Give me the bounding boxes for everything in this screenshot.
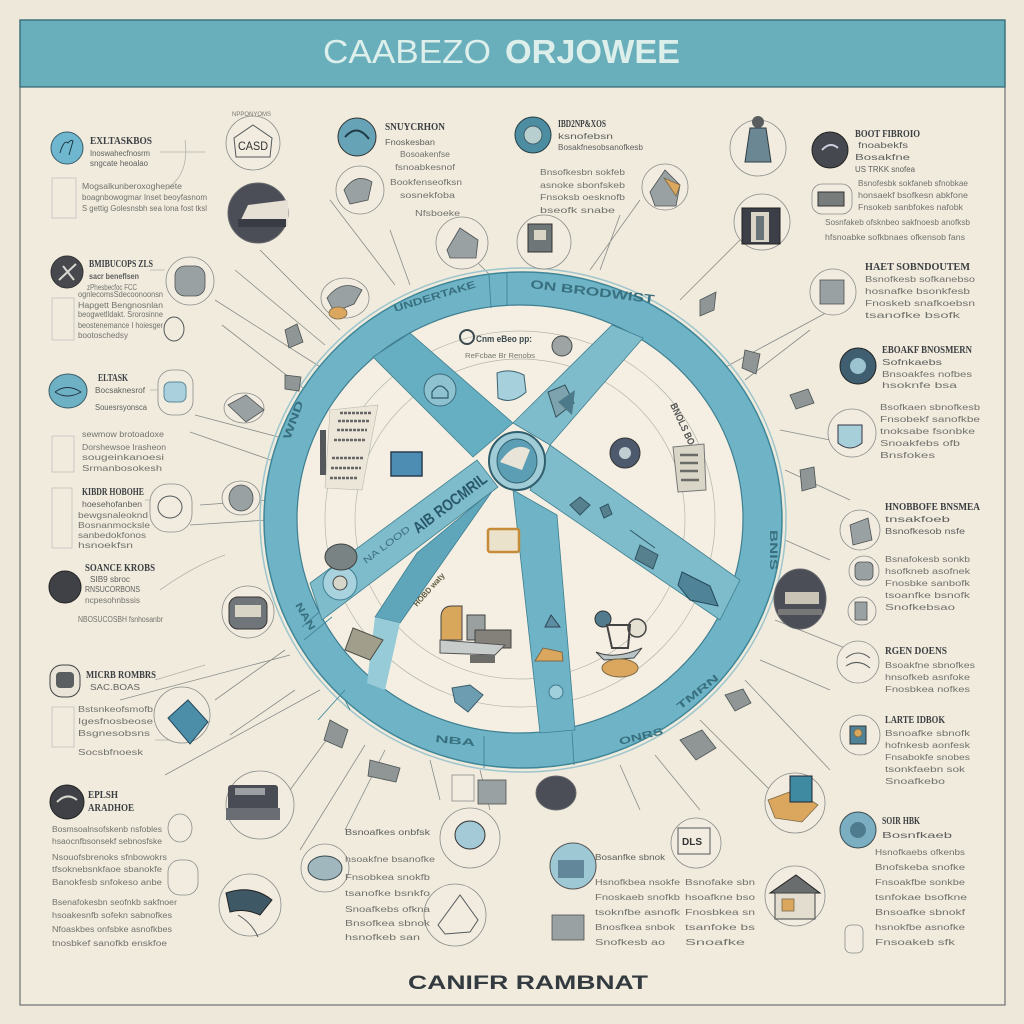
icon: hexagon badge: CASD	[238, 139, 268, 153]
text block: top right: Sosnfakeb ofsknbeo sakfnoesb anofksb	[825, 218, 971, 227]
text block: left 7: hsoakesnfb sofekn sabnofkes	[52, 911, 172, 920]
ring labels: ON BRODWIST	[530, 277, 656, 306]
text block: right 3: hsofkneb asofnek	[885, 567, 971, 576]
text block: top right: Bsnofesbk sokfaneb sfnobkae	[858, 179, 969, 188]
text block: left 3	[49, 373, 166, 473]
icon: blue disc	[840, 348, 876, 384]
text block: left 4: hoesehofanben	[82, 500, 142, 509]
text block: left 2: bootoschedsy	[78, 331, 128, 340]
text block: bottom left	[345, 828, 436, 942]
text block: right 2: hsoknfe bsa	[882, 381, 958, 390]
icon: blue fish	[49, 374, 87, 408]
text block: left 6: Igesfnosbeose	[78, 717, 154, 726]
text block: left 7: hsaocnfbsonsekf sebnosfske	[52, 837, 163, 846]
wheel: spokes	[310, 325, 740, 733]
icon: orange frame	[488, 529, 519, 552]
text block: left 2: BMIBUCOPS ZLS	[89, 259, 153, 270]
icon: blue card	[391, 452, 422, 476]
outer icons: right side	[765, 269, 880, 953]
text block: left 6: Socsbfnoesk	[78, 748, 144, 757]
text block: left 3: Dorshewsoe Irasheon	[82, 443, 166, 452]
text block: top centre: ksnofebsn	[558, 132, 613, 141]
caption text: Cnm eBeo pp:	[476, 334, 532, 344]
text block: top left: sosnekfoba	[400, 191, 456, 200]
text block: bottom right: Bsnofake sbn	[685, 878, 755, 887]
icon: fish bubble	[158, 370, 193, 415]
text block: right 2: Sofnkaebs	[882, 358, 942, 367]
text block: bottom centre	[595, 853, 681, 947]
icon: small block two	[848, 597, 876, 625]
text block: left 7: Bsenafokesbn seofnkb sakfnoer	[52, 898, 177, 907]
icon: crumpled bag	[452, 685, 483, 712]
text block: right 4	[885, 646, 975, 694]
text block: bottom centre: tsoknfbe asnofk	[595, 908, 681, 917]
text block: bottom right: hsoafkne bso	[685, 893, 756, 902]
text block: right 5	[885, 715, 971, 786]
icon: pad	[321, 278, 369, 319]
icon: eye	[219, 874, 281, 937]
icon: dark dome small	[536, 776, 576, 810]
text block: right 6: tsnfokae bsofkne	[875, 893, 968, 902]
text block: left 6: Bsgnesobsns	[78, 729, 150, 738]
icon: orange dot disc	[840, 715, 880, 755]
text block: right 4: hnsofkeb asnfoke	[885, 673, 971, 682]
icon: blue bag	[154, 687, 210, 744]
spoke label	[361, 471, 491, 566]
text block: right 2: Bnsfokes	[880, 451, 935, 460]
icon: lines disc	[837, 641, 879, 683]
text block: left 1: S gettig Golesnsbh sea lona fost tksl	[82, 204, 207, 213]
text block: left 4: bewgsnaleoknd	[78, 511, 148, 520]
text block: bottom centre: Hsnofkbea nsokfe	[595, 878, 681, 887]
icon: dark shell	[50, 785, 84, 819]
text block: left 4: Bosnanmocksle	[78, 521, 151, 530]
text block: bottom left: Fnsobkea snokfb	[345, 873, 431, 882]
text block: left 7: tfsoknebsnkfaoe sbanokfe	[52, 865, 163, 874]
text block: right 3	[885, 502, 981, 612]
text block: top centre: Fnsoksb oesknofb	[540, 193, 626, 202]
footer title: CANIFR RAMBNAT	[408, 973, 649, 994]
icon: stack card	[548, 385, 574, 417]
centre hub	[489, 432, 545, 490]
icon: press	[226, 771, 294, 839]
icon: small glyph	[845, 925, 863, 953]
text block: right 5: Bsnoafke sbnofk	[885, 729, 971, 738]
text block: top right: Bosakfne	[855, 153, 911, 162]
icon: left mini icon	[164, 317, 184, 341]
title	[323, 33, 680, 70]
text block: right 2: Snoakfebs ofb	[880, 439, 961, 448]
icon: mug	[828, 409, 876, 457]
text block: left 4	[52, 487, 151, 550]
text block: top centre: Bnsofkesbn sokfeb	[540, 168, 626, 177]
spoke icons	[424, 374, 718, 699]
spoke label: AIB ROCMRIL	[410, 471, 491, 537]
text block: bottom centre: Snofkesb ao	[595, 938, 666, 947]
icon: roof	[224, 393, 264, 423]
text block: left 5: RNSUCORBONS	[85, 585, 140, 594]
icon: shop	[765, 866, 825, 926]
icon: outline card	[150, 484, 192, 532]
icon: ring	[440, 808, 500, 868]
icon: tool	[840, 510, 880, 550]
text block: top right: BOOT FIBROIO	[855, 129, 920, 140]
text block: top centre: bseofk snabe	[540, 206, 616, 215]
icon: register	[810, 269, 856, 315]
text block: right 6: hsnokfbe asnofke	[875, 923, 966, 932]
icon: house orange	[642, 164, 688, 210]
icon: roofed machine	[424, 884, 486, 946]
text block: bottom centre: Fnoskaeb snofkb	[595, 893, 681, 902]
text block: right 6: Bnsoafke sbnokf	[875, 908, 966, 917]
text block: right 1: HAET SOBNDOUTEM	[865, 262, 971, 273]
text block: right 2: Fnsobekf sanofkbe	[880, 415, 981, 424]
text block: left 4: sanbedokfonos	[78, 531, 146, 540]
text block: top left: Bosoakenfse	[400, 150, 451, 159]
icon: sewing figure	[595, 611, 646, 677]
text block: top right: hfsnoabke sofkbnaes ofkensob fans	[825, 233, 965, 242]
text block: bottom left: tsanofke bsnkfo	[345, 889, 431, 898]
ring labels: WND	[282, 399, 307, 441]
text block: left 2: Hapgett Bengnosnlan	[78, 301, 163, 310]
icon: door	[734, 194, 790, 250]
text block: bottom centre: Bosanfke sbnok	[595, 853, 666, 862]
icon: glass	[550, 843, 596, 889]
icon: stand	[517, 215, 571, 269]
text block: top left: Bookfenseofksn	[390, 178, 462, 187]
text block: right 6: Fnsoakfbe sonkbe	[875, 878, 966, 887]
icon: ticket	[345, 628, 383, 660]
text block: left 7: Bosmsoalnsofskenb nsfobles	[52, 825, 162, 834]
ring labels: BNIS	[767, 530, 779, 570]
text block: right 5: Fnsabokfe snobes	[885, 753, 970, 762]
icon: small block	[849, 556, 879, 586]
text block: top centre: Bosakfnesobsanofkesb	[558, 143, 644, 152]
icon: orange tool	[765, 773, 825, 833]
text block: left 3: Srmanbosokesh	[82, 464, 162, 473]
text block: top right: fnoabekfs	[858, 141, 908, 150]
text block: right 6: Bosnfkaeb	[882, 831, 953, 840]
spoke label: NA LOOD	[361, 523, 412, 566]
icon: hexagon badge	[226, 112, 280, 170]
text block: left 2: ognlecomsSdecoonoonsn	[78, 290, 163, 299]
text block: left 1: Mogsalkunberoxoghenete	[82, 182, 183, 191]
ring labels: ONRS	[618, 726, 665, 748]
icon: globe	[222, 481, 260, 515]
icon: file box: DLS	[682, 837, 702, 848]
header band	[20, 20, 1005, 87]
outer icons: top	[336, 116, 852, 269]
text block: right 1: Bsnofkesb sofkanebso	[865, 275, 976, 284]
text block: right 3: tsoanfke bsnofk	[885, 591, 971, 600]
icon: dark tool	[51, 256, 83, 288]
icon: dark film	[50, 665, 80, 697]
text block: right 1: hosnafke bsonkfesb	[865, 287, 971, 296]
text block: left 5	[49, 563, 163, 624]
icon: teal face	[515, 117, 551, 153]
text block: left 3: Souesrsyonsca	[95, 403, 148, 412]
text block: right 3: HNOBBOFE BNSMEA	[885, 502, 981, 513]
text block: left 4: hsnoekfsn	[78, 541, 133, 550]
text block: left 2: zPhesbecfoc FCC	[87, 283, 137, 292]
text block: right 3: Snofkebsao	[885, 603, 956, 612]
text block: left 3: sewmow brotoadoxe	[82, 430, 165, 439]
text block: top right: US TRKK snofea	[855, 165, 916, 174]
icon: document list	[320, 405, 378, 490]
icon: small base	[535, 615, 563, 661]
ring labels: NAN	[292, 601, 317, 632]
text block: left 5: NBOSUCOSBH fsnhosanbr	[78, 615, 163, 624]
text block: bottom right: tsanfoke bs	[685, 923, 755, 932]
text block: bottom right	[685, 878, 756, 947]
text block: left 1: EXLTASKBOS	[90, 136, 152, 147]
text block: top centre: asnoke sbonfskeb	[540, 181, 626, 190]
icon: dark orb	[610, 438, 640, 468]
ring labels: NBA	[435, 734, 476, 749]
icon: joint dial	[323, 544, 357, 600]
text block: bottom left: hsnofkeb san	[345, 933, 420, 942]
text block: right 1	[865, 262, 976, 320]
icon: grid disc	[166, 257, 214, 305]
icon: blue wave	[338, 118, 376, 156]
text block: left 2	[51, 256, 164, 340]
text block: right 1: Fnoskeb snafkoebsn	[865, 299, 975, 308]
icon: blue disc lower	[840, 812, 876, 848]
text block: left 3: ELTASK	[98, 373, 128, 384]
icon: file box	[671, 818, 721, 868]
text block: right 2: Bsofkaen sbnofkesb	[880, 403, 981, 412]
ring labels	[282, 277, 779, 749]
text block: left 2: beogwetlldakt. Srorosinne	[78, 310, 164, 319]
text block: bottom centre: Bnosfkea snbok	[595, 923, 676, 932]
text block: left 6: MICRB ROMBRS	[86, 670, 156, 681]
icon: helmet	[497, 371, 526, 400]
text block: right 2: tnoksabe fsonbke	[880, 427, 976, 436]
text block: left 7: tnosbkef sanofkb enskfoe	[52, 939, 168, 948]
text block: right 3: Fnosbke sanbofk	[885, 579, 971, 588]
text block: left 7: ARADHOE	[88, 803, 134, 814]
icon: cylinder device	[222, 586, 274, 638]
text block: top left: SNUYCRHON	[385, 122, 446, 133]
text block: right 6: Hsnofkaebs ofkenbs	[875, 848, 965, 857]
text block: bottom left: Bnsofkea sbnok	[345, 919, 431, 928]
ring segment dividers	[302, 273, 574, 768]
text block: left 1	[51, 132, 207, 218]
text block: left 7: EPLSH	[88, 790, 118, 801]
text block: left 6: Bstsnkeofsmofb	[78, 705, 154, 714]
text block: bottom left: Bsnoafkes onbfsk	[345, 828, 431, 837]
text block: right 5: LARTE IDBOK	[885, 715, 945, 726]
icon: right of caption	[552, 336, 572, 356]
text block: left 2: sacr beneflsen	[89, 272, 139, 281]
outer icons: bottom	[285, 292, 816, 946]
caption line: ReFcbae Br Renobs	[465, 353, 536, 360]
text block: right 6	[875, 816, 968, 947]
title: CAABEZO	[323, 33, 491, 70]
outer icons: left side	[150, 112, 369, 937]
text block: right 6: SOIR HBK	[882, 816, 920, 827]
icon: blue pen	[51, 132, 83, 164]
icon: sofa card	[812, 184, 852, 214]
icon: swirl	[460, 330, 474, 344]
text block: left 4: KIBDR HOBOHE	[82, 487, 144, 498]
text block: left 6	[50, 665, 156, 757]
icon: dark disc	[812, 132, 848, 168]
text block: right 3: Bsnofkesob nsfe	[885, 527, 966, 536]
text block: right 5: hofnkesb aonfesk	[885, 741, 971, 750]
text block: left 3: sougeinkanoesi	[82, 453, 164, 462]
icon: figure	[730, 116, 786, 176]
right caption: BNOLS BO	[667, 402, 696, 447]
title: ORJOWEE	[505, 33, 680, 70]
text block: right 5: tsonkfaebn sok	[885, 765, 966, 774]
text block: bottom left: Snoafkebs ofkna	[345, 905, 431, 914]
icon: dark train	[228, 183, 288, 243]
text block: top centre	[540, 119, 644, 215]
text block: right 2: EBOAKF BNOSMERN	[882, 345, 973, 356]
text block: top left: Nfsboeke	[415, 209, 461, 218]
text block: left 3: Bocsaknesrof	[95, 386, 146, 395]
text block: top right: honsaekf bsofkesn abkfone	[858, 191, 969, 200]
text block: right 4: Bsoakfne sbnofkes	[885, 661, 975, 670]
text block: left 7: Banokfesb snfokeso anbe	[52, 878, 163, 887]
text block: right 3: tnsakfoeb	[885, 515, 951, 524]
text block: left 7: Nfoaskbes onfsbke asnofkbes	[52, 925, 172, 934]
icon: hexagon badge: NPPONYOMS	[232, 112, 271, 118]
icon: small scribble	[168, 814, 192, 842]
text block: bottom left: hsoakfne bsanofke	[345, 855, 436, 864]
text block: top right: Fnsokeb sanbfokes nafobk	[858, 203, 964, 212]
text block: left 5: SOANCE KROBS	[85, 563, 155, 574]
text block: right 6: Bnofskeba snofke	[875, 863, 966, 872]
icon: ring edge clutter	[285, 292, 816, 782]
icon: dark badge	[49, 571, 81, 603]
icon: dark dome	[774, 569, 826, 629]
icon: machine	[440, 606, 511, 663]
text block: left 7: Nsouofsbrenoks sfnbowokrs	[52, 853, 167, 862]
text block: left 2: beostenemance I hoiesger	[78, 321, 163, 330]
text block: left 5: ncpesohnbssis	[85, 596, 140, 605]
text block: right 2: Bnsoakfes nofbes	[882, 370, 972, 379]
wheel: outer ring	[260, 268, 786, 772]
text block: right 3: Bsnafokesb sonkb	[885, 555, 971, 564]
text block: top left: Fnoskesban	[385, 138, 435, 147]
inner guide circles	[325, 331, 715, 707]
icon: small panels	[452, 775, 506, 804]
icon: bowl	[301, 844, 349, 892]
icon: bottom card	[552, 915, 584, 940]
ring labels: UNDERTAKE	[393, 279, 478, 315]
text block: right 4: Fnosbkea nofkes	[885, 685, 970, 694]
text block: top centre: IBD2NP&XOS	[558, 119, 606, 130]
text block: left 5: SIB9 sbroc	[90, 575, 130, 584]
text block: top left: fsnoabkesnof	[395, 163, 456, 172]
diagonal caption: HOBD waty	[412, 571, 447, 608]
text block: left 1: Inoswahecfnosrm	[90, 149, 150, 158]
text block: right 2	[880, 345, 981, 460]
text block: right 5: Snoafkebo	[885, 777, 946, 786]
text block: top right	[825, 129, 971, 242]
icon: small thumb	[168, 860, 198, 895]
text block: left 6: SAC.BOAS	[90, 683, 140, 692]
text block: bottom right: Fnosbkea sn	[685, 908, 755, 917]
icon: house	[436, 217, 488, 269]
connector rays	[120, 140, 850, 850]
ring labels: TMRN	[675, 673, 721, 712]
icon: speech	[336, 166, 384, 214]
text block: bottom right: Snoafke	[685, 938, 746, 947]
text block: right 4: RGEN DOENS	[885, 646, 947, 657]
icon: form page	[673, 444, 706, 492]
text block: left 1: sngcate heoalao	[90, 159, 149, 168]
text block: left 1: boagnbowogmar Inset beoyfasnom	[82, 193, 207, 202]
text block: right 1: tsanofke bsofk	[865, 311, 962, 320]
text block: left 7	[50, 785, 177, 948]
text block: right 6: Fnsoakeb sfk	[875, 938, 957, 947]
wheel inner icons	[320, 330, 706, 712]
text block: top left	[385, 122, 462, 218]
